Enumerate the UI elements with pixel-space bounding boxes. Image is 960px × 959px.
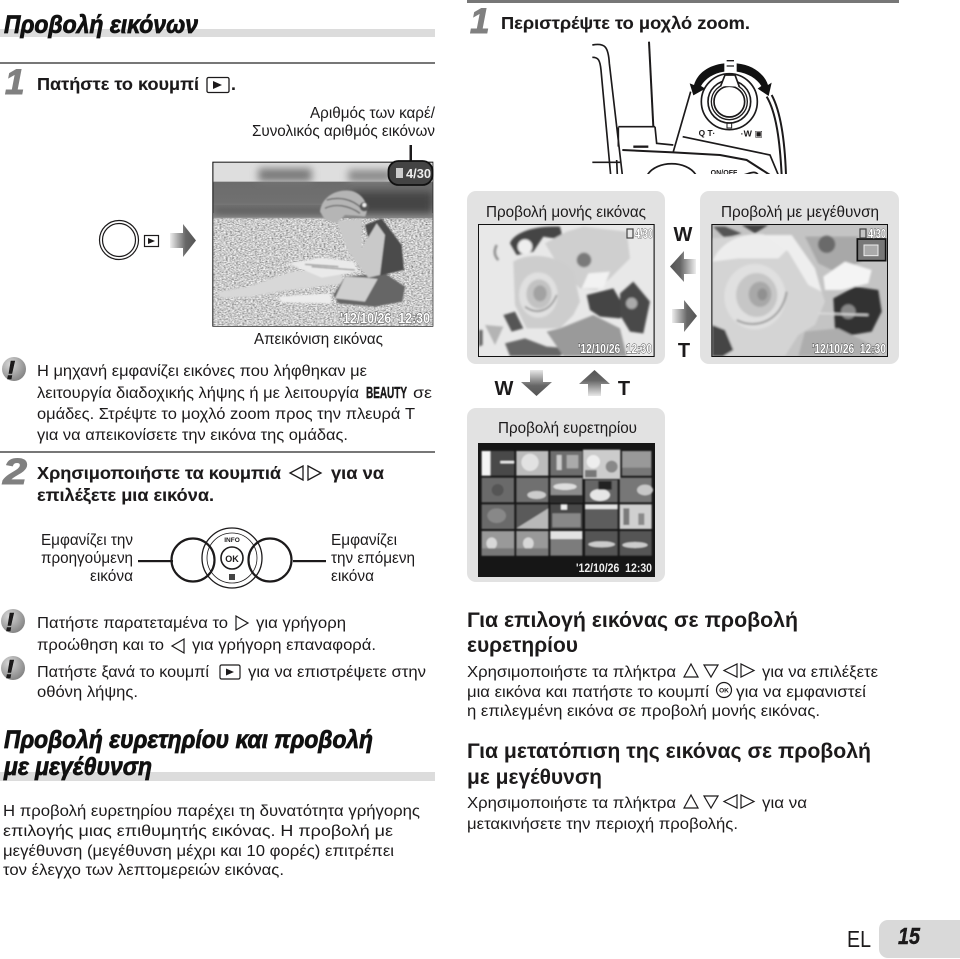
paragraph: index and close-up description: Η προβολή ευρετηρίου παρέχει τη δυνατότητα γρήγορης	[3, 803, 420, 820]
arrow: to image display	[170, 224, 196, 257]
section: selecting an image in index view: η επιλεγμένη εικόνα σε προβολή μονής εικόνας.	[467, 703, 820, 720]
label: next image: Εμφανίζει	[331, 532, 398, 549]
section: selecting an image in index view: για να εμφανιστεί	[736, 684, 867, 701]
note icon and text: grouped images	[2, 355, 432, 444]
photo: flower bouquet	[478, 224, 655, 357]
note icon and text: grouped images: !	[6, 355, 16, 385]
note icon and text: grouped images: Η μηχανή εμφανίζει εικόνες που λήφθηκαν με	[37, 363, 367, 380]
note icon and text: grouped images: για να απεικονίσετε την εικόνα της ομάδας.	[37, 427, 348, 444]
diagram: arrow pad with highlighted left and right keys: INFO	[224, 537, 240, 544]
paragraph: index and close-up description: επιλογής μιας επιθυμητής εικόνας. Η προβολή με	[3, 823, 393, 840]
note: return to shooting screen: οθόνη λήψης.	[37, 684, 138, 701]
paragraph: index and close-up description: τον έλεγχο των λεπτομερειών εικόνας.	[3, 862, 284, 879]
illustration: camera top with zoom lever: ·W ▣	[741, 129, 763, 139]
panel: index view	[467, 408, 665, 582]
note: fast forward and rewind: προώθηση και το	[37, 637, 164, 654]
note: fast forward and rewind: !	[6, 607, 14, 637]
note: fast forward and rewind	[1, 607, 376, 654]
note: fast forward and rewind: για γρήγορη	[256, 615, 346, 632]
panel: close-up view: Προβολή με μεγέθυνση	[721, 204, 879, 221]
note: return to shooting screen: !	[6, 654, 14, 684]
heading: Προβολή εικόνων	[0, 11, 435, 39]
section: selecting an image in index view	[467, 608, 878, 720]
heading: index and close-up view	[0, 726, 435, 781]
note: return to shooting screen	[1, 654, 426, 701]
label: previous image: προηγούμενη	[41, 550, 133, 567]
footer: language code and page number: 15	[898, 923, 921, 949]
note: return to shooting screen: Πατήστε ξανά το κουμπί	[37, 664, 210, 681]
section: selecting an image in index view: για να επιλέξετε	[762, 664, 878, 681]
note: fast forward and rewind: Πατήστε παρατεταμένα το	[37, 615, 228, 632]
section: selecting an image in index view: Για επιλογή εικόνας σε προβολή	[467, 608, 798, 632]
note icon and text: grouped images: ομάδες. Στρέψτε το μοχλό zoom προς την πλευρά T	[37, 406, 415, 423]
panel: single image view: '12/10/26 12:30	[578, 342, 652, 356]
section: moving the image in close-up view: για να	[762, 795, 807, 812]
panel: index view: '12/10/26 12:30	[576, 561, 652, 575]
illustration: camera top with zoom lever	[592, 42, 786, 177]
zoom labels and arrows between single and index view: T	[618, 378, 630, 400]
paragraph: index and close-up description: μεγέθυνση (μεγέθυνση μέχρι και 10 φορές) επιτρέπει	[3, 843, 395, 860]
photo: enlarged rose	[711, 224, 888, 357]
section: moving the image in close-up view: μετακινήσετε την περιοχή προβολής.	[467, 816, 738, 833]
label: previous image: εικόνα	[90, 568, 133, 585]
footer: language code and page number: EL	[847, 926, 871, 952]
step 1 (right): turn the zoom lever: Περιστρέψτε το μοχλό zoom.	[501, 13, 750, 33]
panel: close-up view: 4/30	[868, 227, 886, 241]
callout: frame number label	[252, 105, 436, 163]
section: selecting an image in index view: ευρετηρίου	[467, 633, 578, 657]
section: selecting an image in index view: μια εικόνα και πατήστε το κουμπί	[467, 684, 710, 701]
photo date stamp: '12/10/26 12:30	[340, 311, 430, 327]
thumbnail grid	[482, 450, 653, 556]
badge: 4/30 frame counter	[388, 161, 432, 185]
step 1 (right): turn the zoom lever: 1	[470, 2, 489, 41]
panel: close-up view: '12/10/26 12:30	[812, 342, 886, 356]
paragraph: index and close-up description	[3, 803, 420, 879]
heading: index and close-up view: με μεγέθυνση	[3, 753, 152, 781]
woman figure	[217, 191, 405, 307]
note: return to shooting screen: για να επιστρέψετε στην	[248, 664, 426, 681]
step 1 number and instruction: Πατήστε το κουμπί	[37, 74, 199, 94]
note icon and text: grouped images: λειτουργία διαδοχικής λήψης ή με λειτουργία	[37, 385, 359, 402]
step 2 number and instruction: επιλέξετε μια εικόνα.	[37, 485, 214, 506]
note: fast forward and rewind: για γρήγορη επαναφορά.	[192, 637, 376, 654]
section: moving the image in close-up view	[467, 739, 871, 833]
heading: Προβολή εικόνων: Προβολή εικόνων	[4, 11, 198, 39]
heading: index and close-up view: Προβολή ευρετηρίου και προβολή	[4, 726, 373, 754]
label: next image	[331, 532, 415, 585]
label: previous image	[41, 532, 133, 585]
note icon and text: grouped images: σε	[413, 385, 432, 402]
zoom labels and arrows between single and close-up view: T	[678, 340, 690, 362]
badge: 4/30 frame counter: 4/30	[406, 166, 431, 181]
label: next image: την επόμενη	[331, 550, 415, 567]
label: previous image: Εμφανίζει την	[41, 532, 133, 549]
section: moving the image in close-up view: Χρησιμοποιήστε τα πλήκτρα	[467, 795, 676, 812]
section: selecting an image in index view: Χρησιμοποιήστε τα πλήκτρα	[467, 664, 676, 681]
callout: frame number label: Συνολικός αριθμός εικόνων	[252, 123, 435, 140]
zoom labels and arrows between single and index view	[495, 370, 630, 400]
step 2 number and instruction: Χρησιμοποιήστε τα κουμπιά	[37, 463, 281, 483]
footer: language code and page number	[847, 920, 960, 958]
step 2 number and instruction	[2, 451, 384, 506]
panel: single image view: 4/30	[635, 227, 653, 241]
step 2 number and instruction: 2	[2, 451, 27, 492]
section: moving the image in close-up view: με μεγέθυνση	[467, 765, 602, 789]
illustration: camera top with zoom lever: Q T·	[699, 128, 715, 138]
step 1 number and instruction: 1	[5, 63, 24, 102]
caption: image display: Απεικόνιση εικόνας	[254, 331, 383, 348]
step 1 number and instruction: .	[231, 74, 236, 94]
panel: close-up view	[700, 191, 899, 364]
panel: single image view	[467, 191, 665, 364]
illustration: camera top with zoom lever: ON/OFF	[711, 168, 738, 177]
photo: woman reading on grass	[212, 162, 433, 327]
step 1 (right): turn the zoom lever	[470, 2, 750, 41]
diagram: arrow pad with highlighted left and right keys: OK	[225, 554, 239, 564]
icon: playback button	[100, 220, 158, 260]
section: selecting an image in index view: OK	[719, 688, 729, 694]
step 1 number and instruction	[5, 63, 236, 102]
zoom labels and arrows between single and close-up view	[670, 224, 697, 362]
zoom labels and arrows between single and index view: W	[495, 378, 514, 400]
panel: index view: Προβολή ευρετηρίου	[498, 420, 637, 437]
section: moving the image in close-up view: Για μετατόπιση της εικόνας σε προβολή	[467, 739, 871, 763]
panel: single image view: Προβολή μονής εικόνας	[486, 204, 646, 221]
label: next image: εικόνα	[331, 568, 374, 585]
diagram: arrow pad with highlighted left and right keys	[138, 528, 326, 588]
step 2 number and instruction: για να	[331, 463, 384, 483]
zoom labels and arrows between single and close-up view: W	[674, 224, 693, 246]
callout: frame number label: Αριθμός των καρέ/	[310, 105, 436, 122]
note icon and text: grouped images: BEAUTY	[366, 385, 407, 402]
